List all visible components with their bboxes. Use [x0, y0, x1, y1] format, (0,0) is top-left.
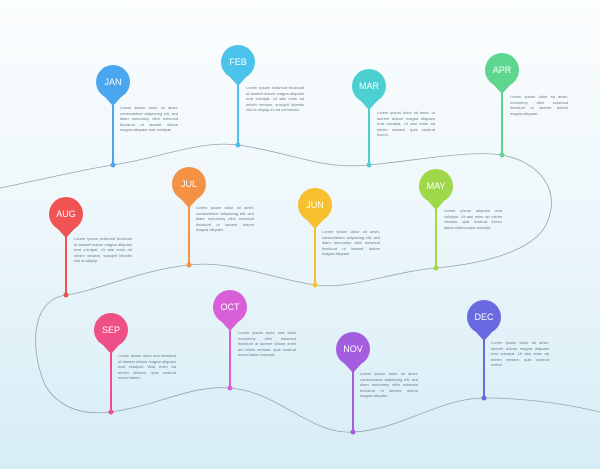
pin: JUN: JUN — [306, 200, 324, 210]
pin: MAY — [419, 169, 453, 270]
pin: NOV: NOV — [343, 344, 363, 354]
pin: DEC — [467, 300, 501, 400]
pin: JAN — [96, 65, 130, 168]
text: OCT: Lorem ipsum dolor sed diam nonummy nibh euismod tincidunt ut laoreet dolore enim ad minim veniam, quis nostrud exerci tation suscipit. — [238, 330, 296, 357]
pin: APR: APR — [493, 65, 512, 75]
pin: OCT: OCT — [220, 302, 240, 312]
pin: APR — [485, 53, 519, 158]
pin: JUL — [172, 167, 206, 268]
text: JUN: Lorem ipsum dolor sit amet, consectetuer adipiscing elit, sed diam nonummy nibh euismod tincidunt ut laoreet dolore magna aliquam. — [322, 229, 380, 256]
pin: FEB: FEB — [229, 57, 247, 67]
text: APR: Lorem ipsum dolor sit amet, nonummy nibh euismod tincidunt ut laoreet dolore magna aliquam. — [510, 94, 568, 116]
text: MAR: Lorem ipsum dolor sit amet, ut laoreet dolore magna aliquam erat volutpat. Ut wisi enim ad minim veniam, quis nostrud exerci. — [377, 110, 435, 137]
pin: FEB — [221, 45, 255, 148]
text: MAY: Lorem ipsum aliquam erat volutpat. Ut wisi enim ad minim veniam, quis nostrud exerci tation ullamcorper suscipit. — [444, 208, 502, 230]
pin: AUG: AUG — [56, 209, 76, 219]
pin: MAY: MAY — [427, 181, 445, 191]
pin: JUL: JUL — [181, 179, 197, 189]
text: JAN: Lorem ipsum dolor sit amet, consectetuer adipiscing elit, sed diam nonummy nibh euismod tincidunt ut laoreet dolore magna aliquam erat volutpat. — [120, 105, 178, 132]
pin: SEP: SEP — [102, 325, 120, 335]
text: JUL: Lorem ipsum dolor sit amet, consectetuer adipiscing elit, sed diam nonummy nibh euismod tincidunt ut laoreet dolore magna aliquam. — [196, 205, 254, 232]
pin: AUG — [49, 197, 83, 298]
text: AUG: Lorem ipsum euismod tincidunt ut laoreet dolore magna aliquam erat volutpat. Ut wisi enim ad minim veniam, suscipit lobortis nisl ut aliquip. — [74, 236, 132, 263]
text: FEB: Lorem ipsum euismod tincidunt ut laoreet dolore magna aliquam erat volutpat. Ut wisi enim ad minim veniam, suscipit lobortis nisl ut aliquip ex ea commodo. — [246, 85, 304, 112]
pin: SEP — [94, 313, 128, 414]
pin: MAR: MAR — [359, 81, 380, 91]
pin: JAN: JAN — [104, 77, 122, 87]
text: DEC: Lorem ipsum dolor sit amet, laoreet dolore magna aliquam erat volutpat. Ut wisi enim ad minim veniam, quis nostrud exerci. — [491, 340, 549, 367]
pin: DEC: DEC — [474, 312, 494, 322]
pin: OCT — [213, 290, 247, 390]
pin: JUN — [298, 188, 332, 288]
pin: MAR — [352, 69, 386, 168]
pin: NOV — [336, 332, 370, 434]
text: SEP: Lorem ipsum dolor eca tincidunt ut laoreet dolore magna aliquam erat volutpat. Wisi enim ad minim veniam, quis nostrud exerci tation. — [118, 353, 176, 380]
text: NOV: Lorem ipsum dolor sit amet, consectetuer adipiscing elit, sed diam nonummy nibh euismod tincidunt ut laoreet dolore magna aliquam. — [360, 371, 418, 398]
